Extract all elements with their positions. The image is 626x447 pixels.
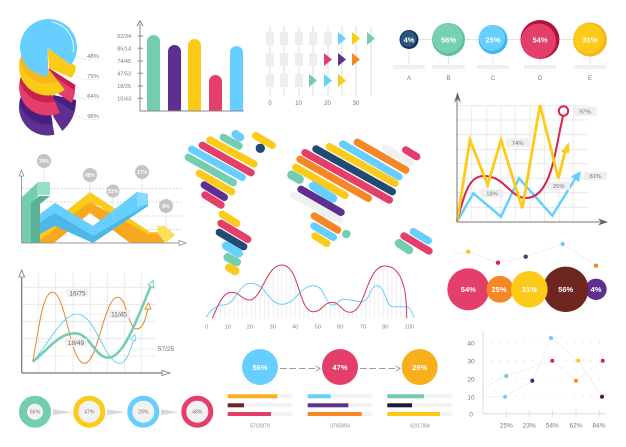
chart: donut sequence (23, 398, 211, 425)
wave axis labels: 50 (314, 324, 321, 330)
wave axis labels: 60 (337, 324, 344, 330)
chart: overlapping bubbles with line (447, 242, 607, 312)
zigzag labels: 97% (579, 109, 591, 115)
flow values (252, 363, 428, 372)
curve labels: 57/25 (158, 346, 175, 353)
bubble values: 25% (485, 36, 501, 44)
slider axis labels: 30 (353, 101, 360, 107)
donut values: 56% (30, 410, 41, 416)
donut values: 29% (138, 410, 149, 416)
scatter x labels: 25% (500, 422, 513, 430)
bubble percentages: 31% (522, 285, 537, 294)
bubble values: 54% (532, 36, 548, 44)
bubble letters: E (588, 76, 592, 82)
bar labels: 18/25 (117, 84, 131, 90)
wave axis labels (205, 324, 414, 330)
scatter x labels: 84% (592, 422, 606, 430)
value badges: 48% (85, 173, 96, 179)
scatter y labels: 20 (467, 376, 475, 384)
slider axis labels: 20 (324, 101, 331, 107)
scatter x labels (500, 422, 606, 430)
wave axis labels: 80 (382, 324, 389, 330)
progress captions (250, 424, 430, 430)
scatter y labels: 0 (469, 412, 473, 418)
scatter x labels: 62% (569, 422, 583, 430)
bubble values (404, 36, 598, 44)
progress fills (228, 394, 440, 416)
bubble letters (407, 76, 592, 82)
map: north america (188, 134, 272, 205)
bubble letters: C (491, 76, 496, 82)
chart: lettered bubbles (393, 20, 607, 82)
bubble percentages (461, 285, 602, 294)
progress captions: 57/20/79 (250, 424, 270, 430)
wave axis labels: 30 (269, 324, 276, 330)
bar labels: 47/53 (117, 71, 131, 77)
value badges (37, 154, 173, 213)
bar labels: 85/14 (117, 46, 131, 52)
wave axis labels: 100 (404, 324, 414, 330)
bubble values: 31% (582, 36, 598, 44)
bubble values: 56% (441, 36, 456, 44)
chart: 3D ribbon lines (19, 154, 186, 246)
flow values: 56% (252, 363, 268, 372)
chart: wave area (205, 265, 414, 330)
chart: scatter plot (467, 330, 606, 430)
value badges: 8% (162, 204, 170, 210)
pie labels: 64% (87, 94, 99, 100)
bubble letters: A (407, 76, 411, 82)
curve labels: 16/75 (69, 290, 86, 298)
map: australia (399, 232, 429, 251)
slider axis labels: 10 (295, 101, 302, 107)
flow values: 29% (412, 363, 428, 372)
pie labels (76, 54, 100, 120)
slider axis labels (268, 101, 360, 107)
chart: vertical bars (117, 21, 244, 111)
zigzag labels: 18% (486, 191, 498, 197)
wave axis labels: 40 (292, 324, 299, 330)
progress captions: 62/17/84 (410, 424, 430, 430)
value badges: 17% (137, 170, 148, 176)
zigzag labels: 81% (589, 174, 601, 180)
map: eurasia and africa (292, 142, 417, 243)
scatter y labels: 10 (467, 394, 475, 402)
world map of colored stripes (188, 134, 429, 271)
scatter x labels: 23% (523, 422, 536, 430)
zigzag labels: 25% (553, 184, 565, 190)
bubble letters: B (446, 76, 451, 82)
wave axis labels: 10 (224, 324, 231, 330)
curve labels: 18/49 (68, 340, 85, 347)
chart: zigzag lines with grid (454, 92, 608, 226)
chart: smooth curves (19, 270, 175, 376)
bubble values: 4% (404, 36, 415, 44)
pie labels: 75% (87, 74, 99, 80)
bubble percentages: 4% (591, 285, 602, 294)
pie labels: 98% (87, 114, 99, 120)
value badges: 70% (39, 159, 50, 165)
scatter y labels: 30 (467, 358, 475, 366)
bubble percentages: 54% (461, 285, 476, 294)
value badges: 51% (108, 189, 119, 195)
curve labels: 11/45 (111, 312, 127, 318)
slider axis labels: 0 (268, 101, 272, 107)
wave axis labels: 20 (247, 324, 253, 330)
bubble letters: D (538, 76, 543, 82)
donut values: 47% (84, 410, 95, 416)
bubble percentages: 56% (558, 285, 574, 294)
bar labels: 74/45 (117, 59, 131, 65)
wave axis labels: 0 (205, 324, 208, 330)
bar labels (117, 34, 131, 102)
donut values (30, 410, 203, 416)
bar labels: 62/34 (117, 34, 131, 40)
chart: slider markers (266, 26, 375, 107)
chart: stacked pie (19, 19, 100, 135)
progress tracks (228, 394, 451, 416)
bar labels: 10/43 (117, 96, 131, 102)
curve labels (65, 289, 175, 353)
pie labels: 48% (87, 54, 99, 60)
scatter x labels: 54% (546, 422, 559, 430)
zigzag labels: 74% (512, 141, 524, 147)
donut values: 48% (192, 410, 203, 416)
wave axis labels: 70 (360, 324, 366, 330)
scatter y labels: 40 (467, 340, 475, 348)
scatter y labels (467, 340, 475, 418)
progress captions: 37/59/93 (330, 424, 350, 430)
map: south america (219, 214, 248, 271)
zigzag labels (481, 107, 607, 197)
bubble percentages: 25% (491, 285, 507, 294)
flow values: 47% (332, 363, 348, 372)
flow: three circles with progress bars (228, 349, 451, 430)
